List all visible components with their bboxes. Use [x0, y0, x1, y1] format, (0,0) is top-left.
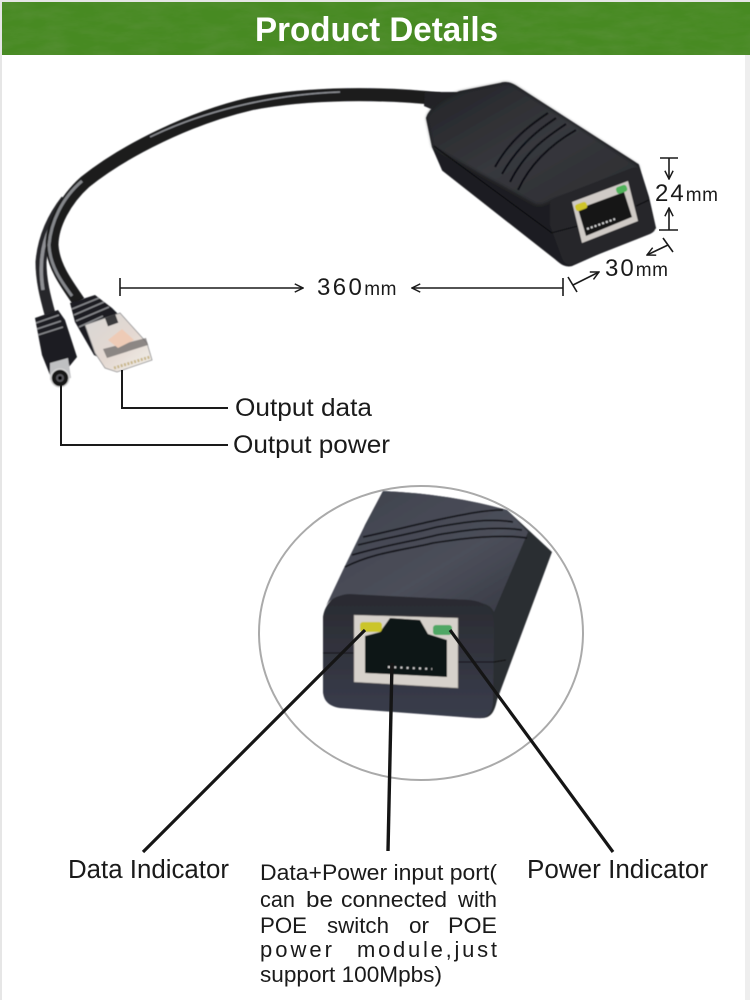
close-up of injector — [323, 491, 552, 718]
front face — [550, 167, 655, 265]
leader: input port — [388, 663, 392, 851]
yellow LED — [360, 622, 382, 632]
description: input port: Data+Power input port( — [260, 860, 498, 885]
label: power indicator: Power Indicator — [527, 856, 709, 884]
port frame — [354, 615, 458, 688]
description: input port: POE — [448, 913, 497, 938]
top surface — [326, 491, 528, 612]
dimension: 30mm — [568, 238, 673, 292]
label: data indicator: Data Indicator — [68, 856, 230, 884]
leader: output power — [61, 385, 228, 445]
contact pins — [388, 667, 432, 669]
header banner — [2, 2, 750, 55]
leader: data indicator — [143, 630, 365, 852]
title: Product Details — [255, 11, 498, 49]
green LED — [615, 184, 628, 194]
label: output power: Output power — [233, 431, 390, 459]
shell — [323, 491, 552, 718]
DC power plug — [35, 310, 77, 387]
clear plug head — [85, 313, 152, 372]
description: input port: support 100Mpbs) — [260, 962, 442, 987]
description: input port — [260, 860, 498, 987]
yellow LED — [574, 201, 588, 212]
body shell — [427, 83, 655, 265]
description: input port: switch — [327, 913, 389, 938]
description: input port: module,just — [357, 937, 497, 962]
seam — [323, 653, 506, 662]
24mm label: 24mm — [655, 180, 719, 207]
front face — [323, 594, 494, 718]
leader: output data — [122, 370, 228, 408]
dimension: 24mm — [659, 158, 678, 230]
injector body — [424, 83, 655, 265]
dimension: 360mm — [120, 278, 563, 296]
top surface — [427, 83, 639, 205]
description: input port: connected — [341, 887, 447, 912]
30mm label: 30mm — [605, 255, 669, 282]
360mm label: 360mm — [317, 274, 397, 301]
green LED — [433, 625, 452, 635]
ribs — [345, 510, 527, 567]
description: input port: or — [409, 913, 429, 938]
description: input port: POE — [260, 913, 307, 938]
magnifier circle — [259, 486, 583, 780]
power lead — [41, 200, 66, 314]
leader: power indicator — [450, 630, 613, 852]
plug boot — [70, 295, 122, 358]
product photo: cable — [41, 92, 440, 314]
label: output data: Output data — [235, 394, 372, 422]
description: input port: with — [457, 887, 497, 912]
cable strain relief — [424, 92, 462, 112]
port socket — [365, 618, 447, 677]
RJ45 port — [572, 181, 638, 243]
description: input port: can — [260, 887, 295, 912]
RJ45 plug — [70, 295, 152, 372]
seam — [434, 146, 552, 233]
data lead and main cable — [52, 95, 440, 302]
description: input port: be — [306, 887, 333, 912]
description: input port: power — [260, 937, 332, 962]
ribs — [495, 113, 576, 190]
